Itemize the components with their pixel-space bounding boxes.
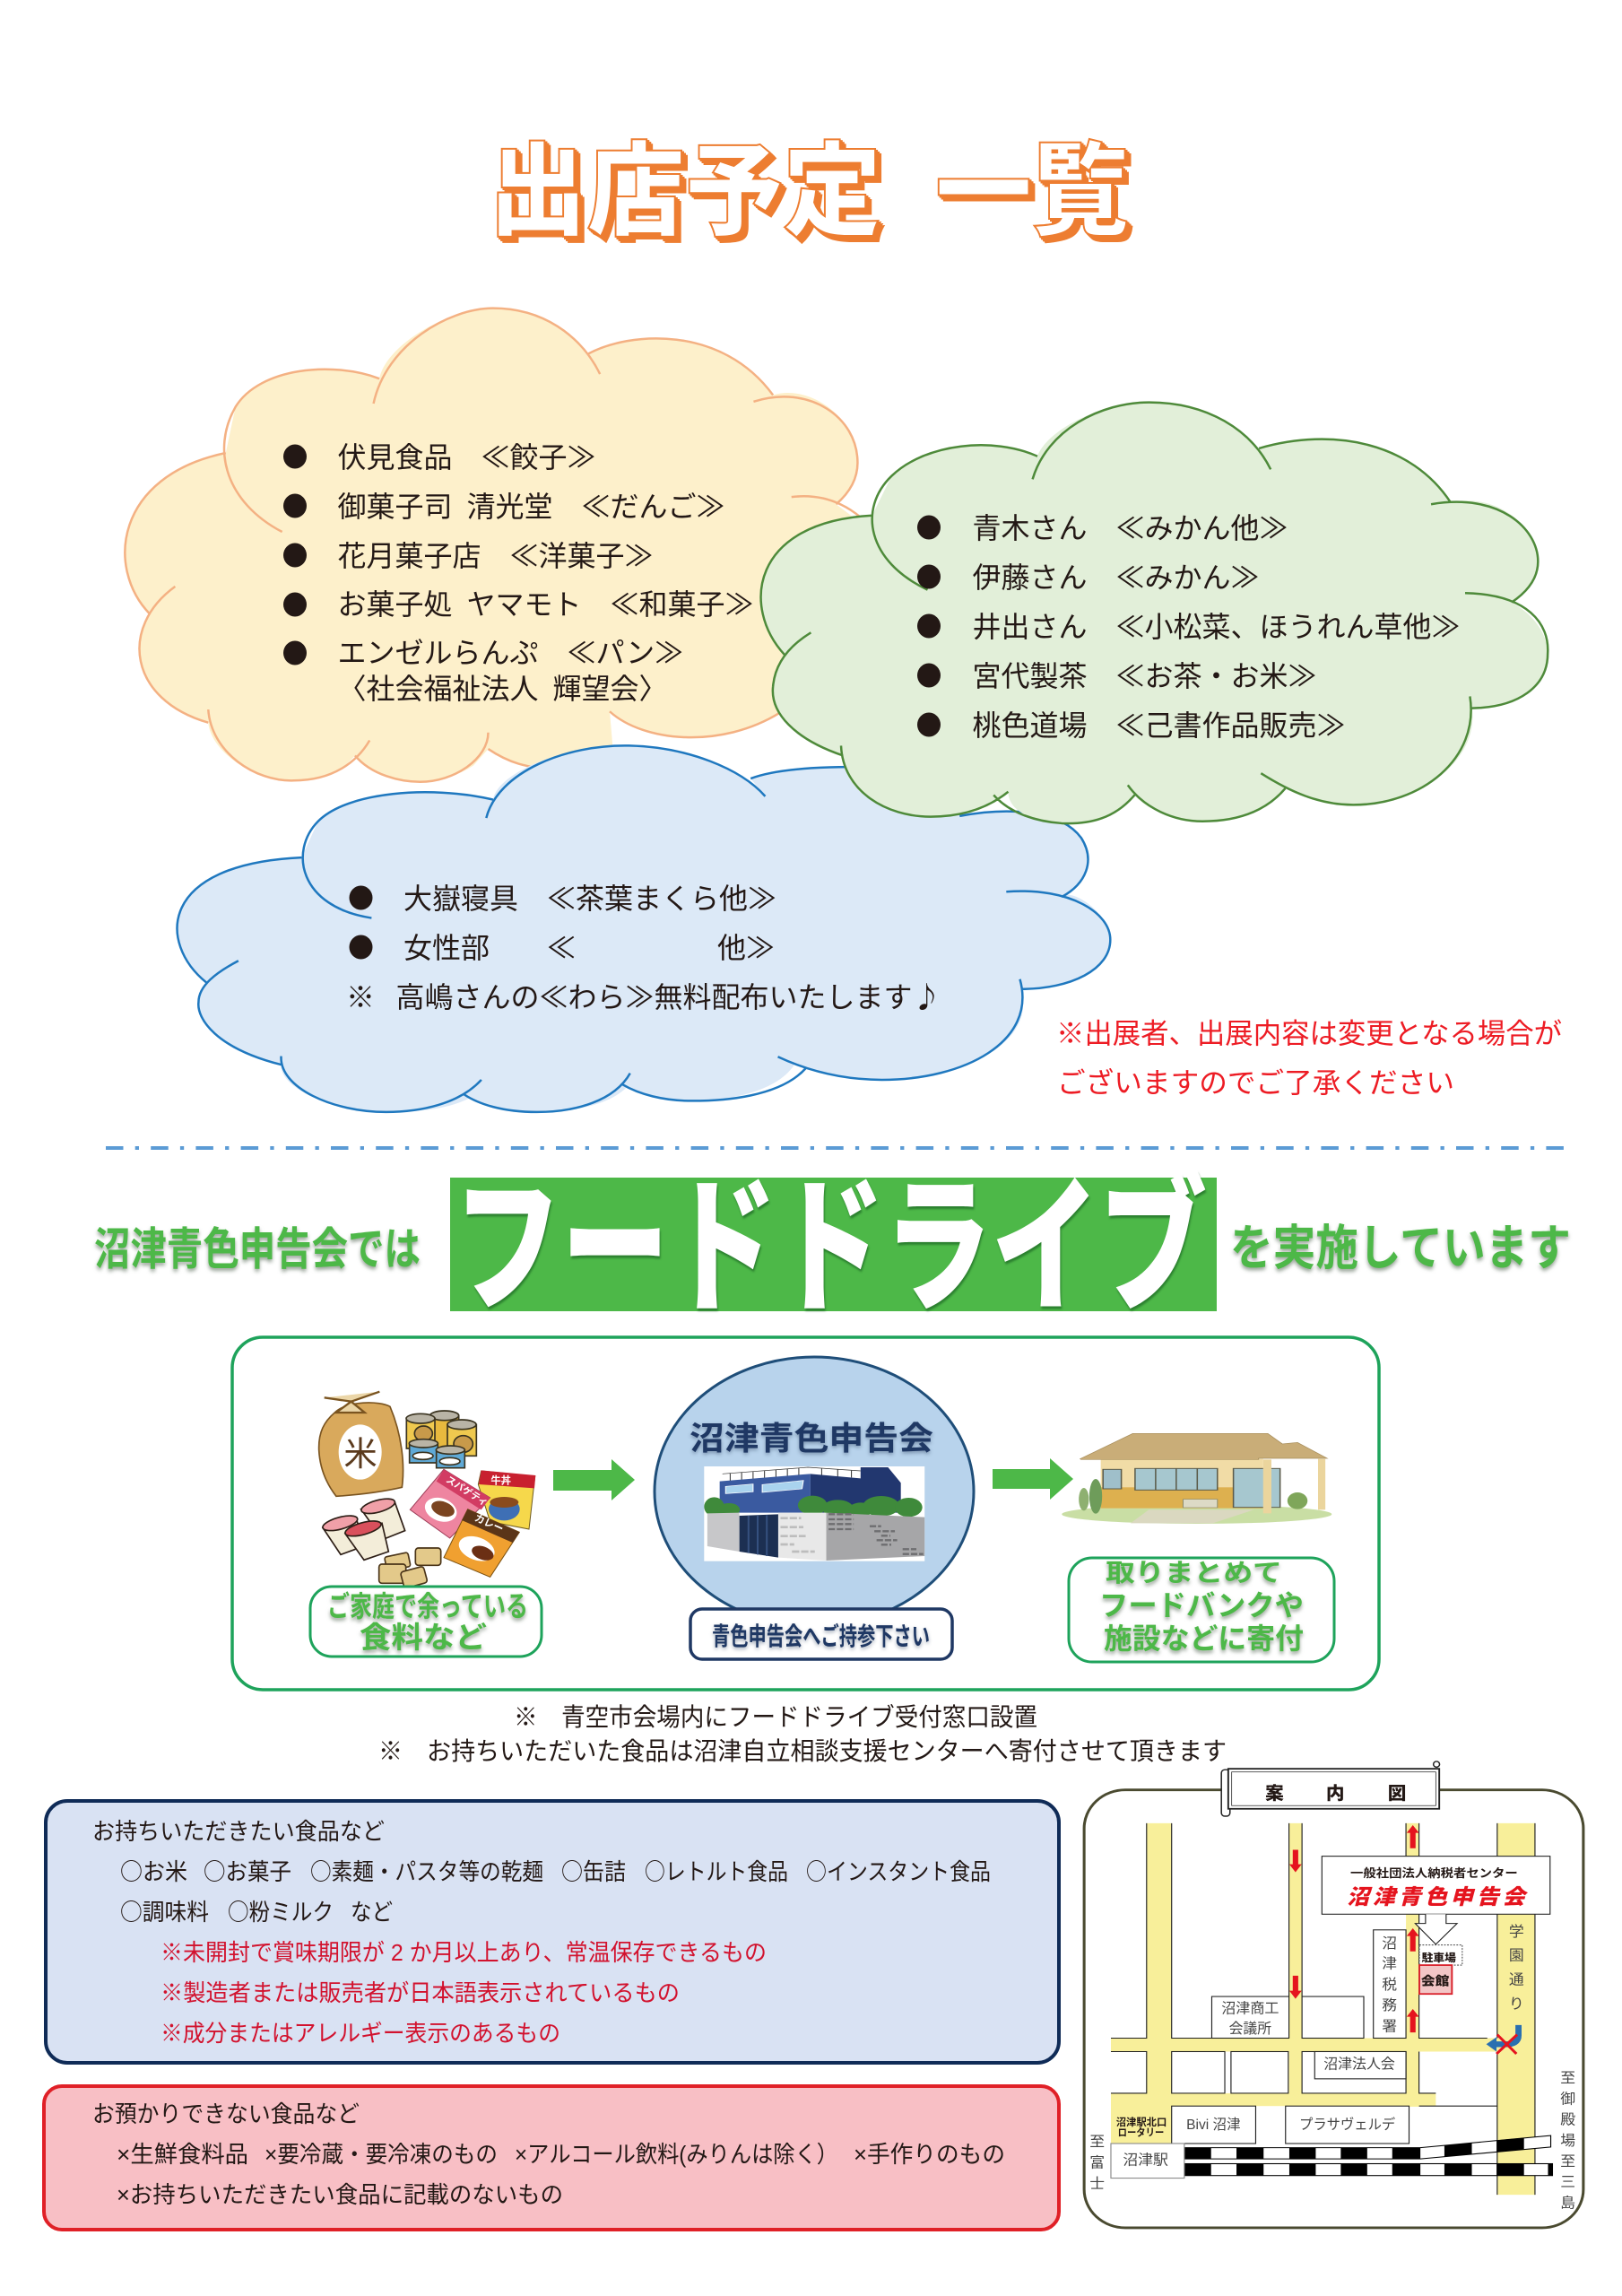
label: household food	[310, 1587, 542, 1657]
map labels: 御	[1560, 2092, 1575, 2107]
panel: rejected foods: ×要冷蔵・要冷凍のもの	[265, 2141, 498, 2168]
map title scroll	[1221, 1761, 1440, 1816]
panel: accepted foods: ○お米	[120, 1854, 187, 1887]
panel: green cloud: 伊藤さん ≪みかん≫	[972, 561, 1260, 594]
panel: rejected foods: ×手作りのもの	[854, 2141, 1005, 2168]
arrow: food to association	[553, 1459, 635, 1500]
panel: accepted foods: ※未開封で賞味期限が 2 か月以上あり、常温保存できるもの	[160, 1939, 767, 1966]
map labels: 沼津商工	[1221, 2001, 1279, 2017]
icon: retort pouches	[410, 1469, 535, 1577]
map labels: 会議所	[1229, 2022, 1271, 2037]
icon: retort pouches: スパゲティ	[444, 1474, 490, 1509]
panel: accepted foods: ○レトルト食品	[645, 1854, 788, 1887]
map: station	[1111, 2144, 1184, 2179]
icon: cans	[406, 1411, 476, 1468]
label: household food: ご家庭で余っている	[327, 1590, 528, 1622]
ellipse: association: 沼津青色申告会	[690, 1420, 933, 1457]
banner: food drive: フードドライブ	[454, 1166, 1207, 1330]
map: hall: 会館	[1421, 1974, 1449, 1987]
panel: orange cloud: お菓子処 ヤマモト ≪和菓子≫	[337, 588, 754, 621]
panel: green cloud	[761, 403, 1548, 823]
red note: ※出展者、出展内容は変更となる場合が	[1056, 1017, 1562, 1049]
panel: accepted foods: ○缶詰	[561, 1854, 626, 1887]
map labels	[1089, 1924, 1575, 2211]
map labels: 島	[1560, 2196, 1575, 2211]
panel: green cloud: 桃色道場 ≪己書作品販売≫	[972, 709, 1346, 742]
panel: accepted foods: ○素麺・パスタ等の乾麺	[310, 1854, 543, 1887]
panel: accepted foods	[46, 1801, 1059, 2063]
panel: accepted foods: ○調味料	[120, 1894, 209, 1927]
panel: blue cloud: 他≫	[717, 932, 775, 964]
map labels: 士	[1089, 2176, 1105, 2192]
map labels: 沼津法人会	[1323, 2057, 1395, 2072]
title: 一覧	[935, 135, 1129, 249]
label: household food: 食料など	[360, 1621, 487, 1654]
panel: blue cloud	[178, 745, 1110, 1112]
panel: blue cloud: 女性部 ≪	[403, 932, 576, 964]
map labels: 至	[1089, 2134, 1105, 2150]
map: venue callout	[1322, 1857, 1550, 1944]
ellipse: association	[655, 1357, 974, 1626]
panel: orange cloud: 御菓子司 清光堂 ≪だんご≫	[337, 491, 725, 523]
map labels: 沼	[1382, 1936, 1397, 1952]
illustration: association building	[704, 1466, 924, 1561]
map: station: 沼津駅	[1123, 2152, 1168, 2168]
icon: retort pouches: 牛丼	[490, 1474, 511, 1486]
map labels: 津	[1382, 1956, 1397, 1972]
panel: blue cloud: 大嶽寝具 ≪茶葉まくら他≫	[403, 883, 776, 915]
map labels: プラサヴェルデ	[1299, 2116, 1395, 2133]
map: parking	[1419, 1945, 1462, 1965]
notes under flow	[378, 1703, 1227, 1765]
panel: green cloud: 井出さん ≪小松菜、ほうれん草他≫	[972, 611, 1461, 643]
panel: accepted foods: ○インスタント食品	[806, 1854, 991, 1887]
label: bring to association	[690, 1609, 952, 1659]
panel: green cloud: 青木さん ≪みかん他≫	[972, 512, 1288, 544]
panel: rejected foods: ×お持ちいただきたい食品に記載のないもの	[117, 2181, 563, 2208]
heading: left green text: 沼津青色申告会では	[94, 1224, 421, 1274]
map title scroll: 図	[1388, 1785, 1406, 1804]
map: hall	[1419, 1965, 1452, 1994]
map labels: 学	[1509, 1924, 1524, 1940]
map labels: 三	[1560, 2175, 1575, 2190]
panel: flow	[232, 1337, 1379, 1690]
map: venue callout: 沼津青色申告会	[1347, 1885, 1529, 1909]
map labels: 至	[1560, 2071, 1575, 2086]
label: donate: 取りまとめて	[1106, 1559, 1282, 1587]
map labels: 富	[1089, 2155, 1105, 2170]
map labels: 税	[1382, 1977, 1397, 1993]
icon: retort pouches: カレー	[473, 1512, 505, 1535]
label: donate: 施設などに寄付	[1104, 1622, 1304, 1655]
map labels: ロータリー	[1118, 2126, 1164, 2138]
illustration: facility house	[1062, 1433, 1331, 1524]
map labels: Bivi 沼津	[1186, 2117, 1241, 2133]
map labels: 通	[1509, 1972, 1524, 1987]
icon: rice bag: 米	[343, 1435, 377, 1473]
map labels: 場	[1560, 2133, 1575, 2149]
panel: blue cloud: ※	[346, 981, 375, 1013]
red note: ございますのでご了承ください	[1057, 1066, 1454, 1099]
map labels: 至	[1560, 2153, 1575, 2170]
panel: orange cloud: 伏見食品 ≪餃子≫	[337, 441, 596, 474]
panel: orange cloud: 〈社会福祉法人 輝望会〉	[337, 673, 668, 705]
panel: rejected foods: ×生鮮食料品	[117, 2141, 248, 2168]
map: tracks	[1184, 2135, 1552, 2176]
map labels: 沼津駅北口	[1116, 2116, 1167, 2128]
label: donate: フードバンクや	[1099, 1589, 1304, 1622]
panel: accepted foods: お持ちいただきたい食品など	[92, 1818, 385, 1845]
panel: rejected foods: お預かりできない食品など	[92, 2100, 360, 2127]
panel: accepted foods: ○お菓子	[204, 1854, 291, 1887]
icon: rice bag	[319, 1392, 403, 1496]
map labels: 園	[1509, 1948, 1524, 1964]
title: 出店予定	[489, 135, 881, 249]
notes under flow: ※ 青空市会場内にフードドライブ受付窓口設置	[514, 1703, 1037, 1731]
map title scroll: 内	[1326, 1784, 1345, 1804]
map labels: 殿	[1560, 2112, 1575, 2127]
panel: map	[1084, 1790, 1583, 2228]
notes under flow: ※ お持ちいただいた食品は沼津自立相談支援センターへ寄付させて頂きます	[378, 1737, 1227, 1765]
panel: accepted foods: ○粉ミルク	[228, 1894, 334, 1927]
panel: accepted foods: など	[351, 1899, 393, 1926]
red note	[1056, 1017, 1562, 1099]
panel: rejected foods: ×アルコール飲料(みりんは除く）	[515, 2141, 838, 2168]
panel: accepted foods: ※成分またはアレルギー表示のあるもの	[160, 2020, 560, 2047]
map labels: 務	[1382, 1998, 1397, 2013]
map: no-entry arrow	[1487, 2025, 1519, 2054]
illustration: food items	[319, 1392, 535, 1588]
arrow: association to facility	[993, 1458, 1073, 1500]
icon: instant noodle cups	[321, 1496, 405, 1560]
panel: orange cloud	[125, 309, 877, 782]
label: bring to association: 青色申告会へご持参下さい	[712, 1622, 930, 1650]
panel: orange cloud: 花月菓子店 ≪洋菓子≫	[337, 540, 654, 572]
panel: orange cloud: エンゼルらんぷ ≪パン≫	[337, 637, 683, 669]
icon: crackers	[379, 1548, 441, 1588]
map: red arrows	[1289, 1825, 1419, 2032]
panel: green cloud: 宮代製茶 ≪お茶・お米≫	[972, 660, 1317, 692]
map: venue callout: 一般社団法人納税者センター	[1350, 1866, 1518, 1880]
heading: right green text: を実施しています	[1230, 1222, 1571, 1275]
map title scroll: 案	[1265, 1784, 1284, 1804]
map labels: り	[1509, 1996, 1524, 2012]
title	[489, 135, 1129, 249]
map: parking: 駐車場	[1422, 1951, 1456, 1964]
panel: accepted foods: ※製造者または販売者が日本語表示されているもの	[160, 1979, 680, 2006]
map labels: 署	[1382, 2019, 1397, 2034]
panel: rejected foods	[44, 2086, 1059, 2230]
panel: blue cloud: 高嶋さんの≪わら≫無料配布いたします♪	[396, 975, 941, 1016]
label: donate	[1069, 1558, 1334, 1662]
